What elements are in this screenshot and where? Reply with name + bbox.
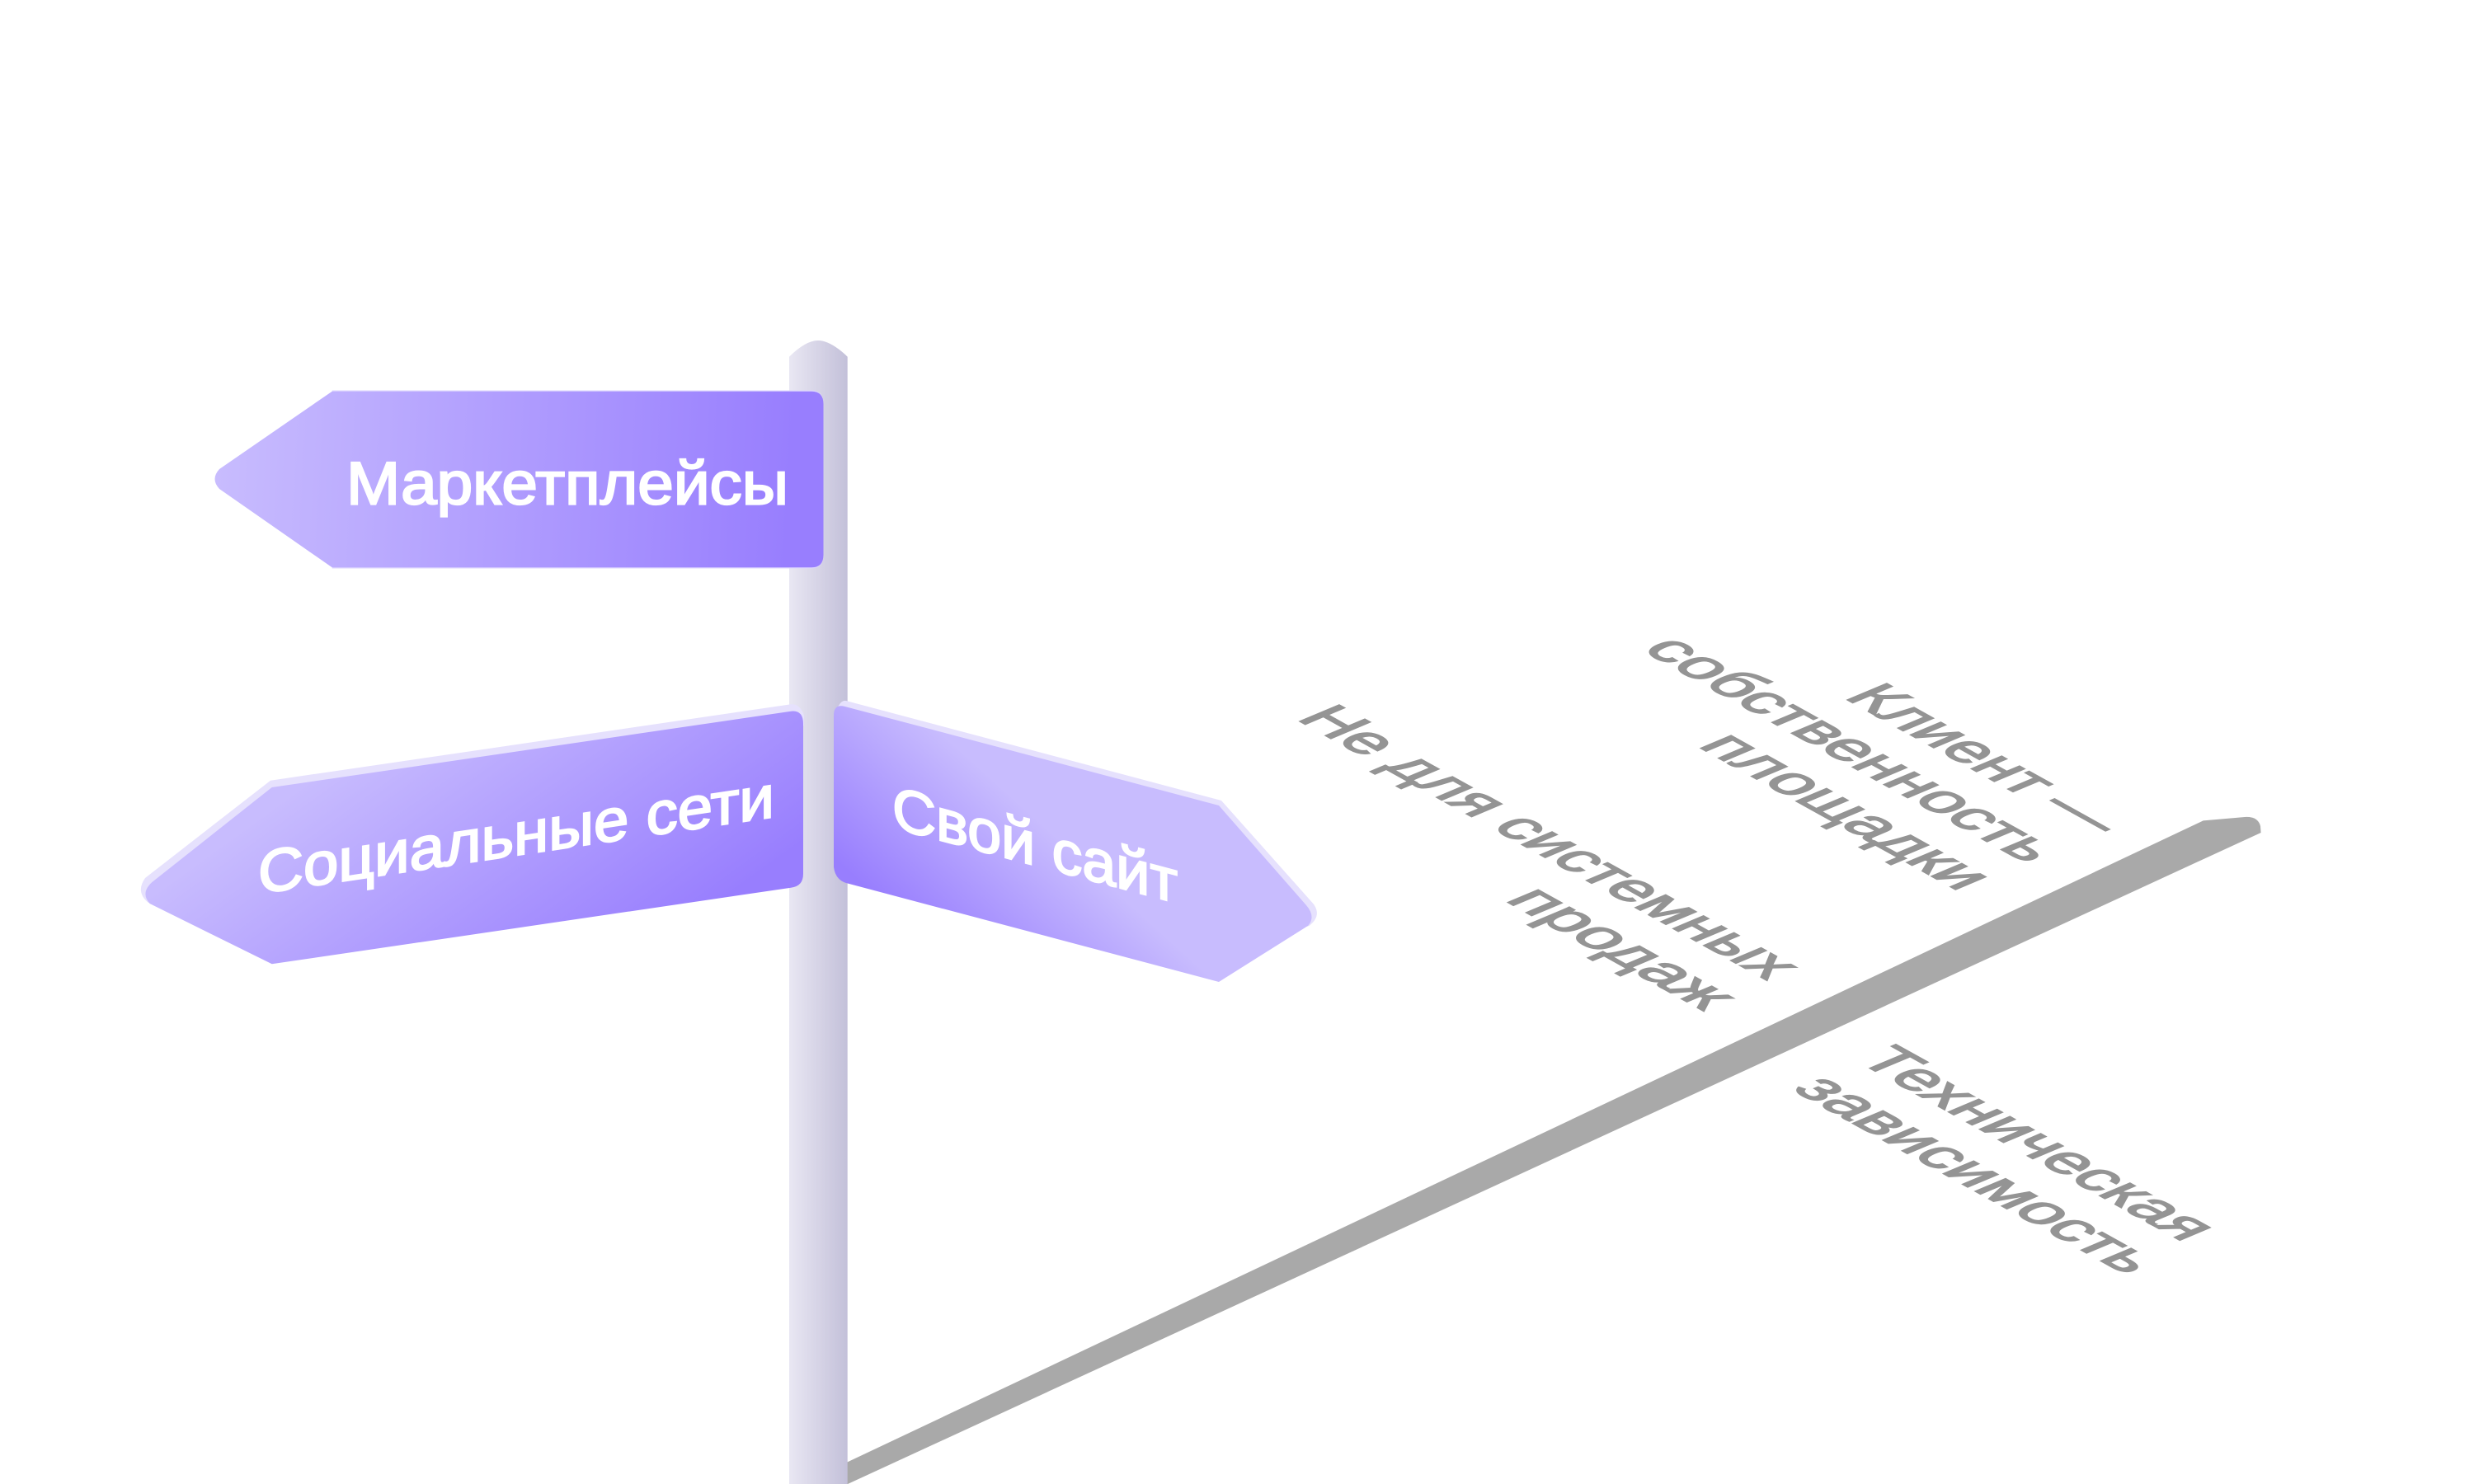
shadow text: client belongs to the platform: Клиент — [1830,676,2144,842]
shadow text: not for systematic sales [1282,697,1818,1017]
sign: own website [834,701,1317,982]
shadow text: not for systematic sales: продаж [1491,879,1755,1017]
shadow text: not for systematic sales: Не для системных [1282,697,1818,986]
sign label: own website: Свой сайт [892,773,1178,916]
shadow text: client belongs to the platform: площадки [1684,725,2010,897]
shadow text: client belongs to the platform: собственность [1628,628,2077,869]
shadow text: technical dependence: Техническая [1842,1039,2234,1247]
sign: social networks [141,704,804,964]
sign label: social networks: Социальные сети [258,763,774,907]
shadow text: technical dependence: зависимость [1778,1068,2177,1280]
signpost pole [789,340,848,1484]
shadow text: technical dependence [1778,1039,2234,1280]
post shadow [841,817,2261,1484]
shadow text: client belongs to the platform [1628,628,2144,897]
sign label: marketplaces: Маркетплейсы [346,450,788,518]
sign: marketplaces [214,391,823,569]
